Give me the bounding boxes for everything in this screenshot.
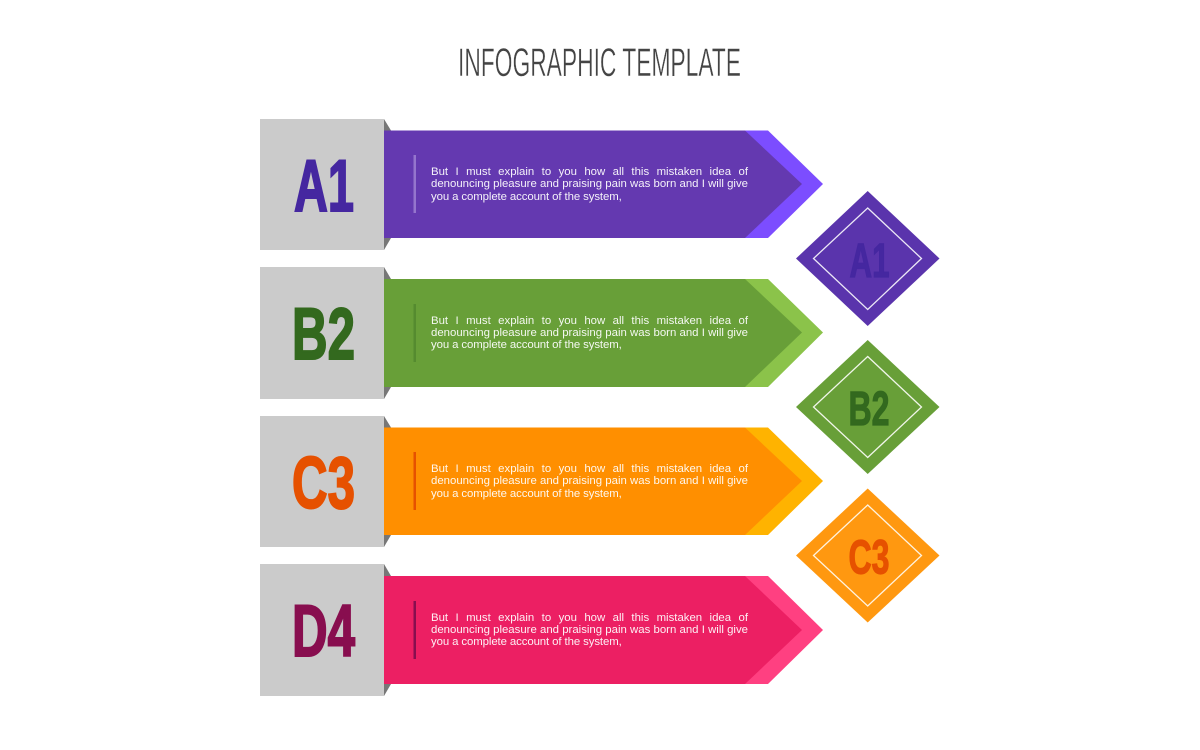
text block D4: you a complete account of the system, xyxy=(431,636,622,648)
text block B2: you a complete account of the system, xyxy=(431,339,622,351)
text block C3 xyxy=(431,463,748,500)
row B2 xyxy=(260,267,823,399)
text block A1 xyxy=(431,166,748,203)
row C3 xyxy=(260,416,823,547)
title: INFOGRAPHIC TEMPLATE xyxy=(458,41,741,85)
label box C3: C3 xyxy=(292,443,355,524)
text block A1: denouncing pleasure and praising pain was born and I will give xyxy=(431,178,748,190)
label box B2 xyxy=(260,267,391,399)
text block C3: denouncing pleasure and praising pain was born and I will give xyxy=(431,475,748,487)
text block B2: denouncing pleasure and praising pain was born and I will give xyxy=(431,327,748,339)
arrow band C3 xyxy=(384,428,823,535)
text block B2 xyxy=(431,315,748,351)
text block C3: But I must explain to you how all this mistaken idea of xyxy=(431,463,748,475)
text block A1: But I must explain to you how all this mistaken idea of xyxy=(431,166,748,178)
diamond C3 xyxy=(796,488,940,622)
text block A1: you a complete account of the system, xyxy=(431,191,622,203)
diamond A1: A1 xyxy=(850,234,890,288)
arrow band B2 xyxy=(384,279,823,387)
row D4 xyxy=(260,564,823,696)
arrow band A1 xyxy=(384,130,823,238)
text block C3: you a complete account of the system, xyxy=(431,488,622,500)
label box A1: A1 xyxy=(294,146,354,227)
label box A1 xyxy=(260,119,391,250)
label box D4 xyxy=(260,564,391,696)
label box B2: B2 xyxy=(292,294,355,375)
diamond B2: B2 xyxy=(848,382,890,436)
text block B2: But I must explain to you how all this mistaken idea of xyxy=(431,315,748,327)
text block D4: denouncing pleasure and praising pain was born and I will give xyxy=(431,624,748,636)
row A1 xyxy=(260,119,823,250)
diamond B2 xyxy=(796,340,940,474)
label box C3 xyxy=(260,416,391,547)
label box D4: D4 xyxy=(292,591,355,672)
text block D4: But I must explain to you how all this mistaken idea of xyxy=(431,612,748,624)
diamond C3: C3 xyxy=(848,530,890,584)
arrow band D4 xyxy=(384,576,823,684)
text block D4 xyxy=(431,612,748,648)
diamond A1 xyxy=(796,191,940,326)
